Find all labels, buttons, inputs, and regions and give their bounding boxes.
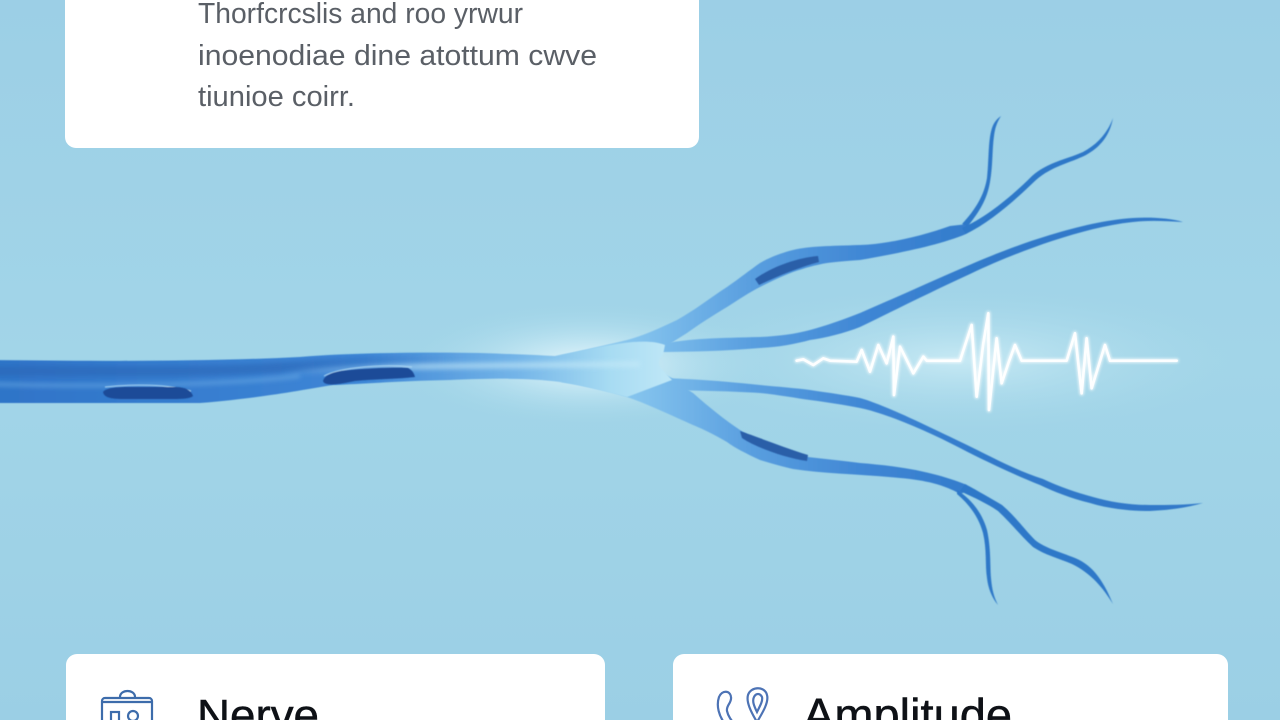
- panel: amplitude card: [673, 654, 1228, 720]
- panel: top text card: [65, 0, 699, 148]
- body text: tiunioe coirr.: [198, 81, 355, 113]
- white waveform glow: [797, 313, 1177, 410]
- node: trunk left: [103, 385, 193, 399]
- nerve trunk: [0, 342, 672, 403]
- upper middle branch: [655, 218, 1183, 352]
- body text: [198, 0, 597, 113]
- lower branch: [560, 365, 1113, 605]
- node: upper branch: [755, 256, 819, 285]
- icon: ears: [718, 688, 767, 720]
- upper branch: [555, 116, 1113, 356]
- icon: clipboard: [102, 691, 152, 720]
- node: trunk right: [323, 366, 415, 384]
- panel: nerve card: [66, 654, 605, 720]
- white waveform: [797, 313, 1177, 410]
- nerve illustration: [0, 116, 1203, 605]
- waveform glow: [670, 285, 1250, 435]
- body text: inoenodiae dine atottum cwve: [198, 40, 597, 72]
- node: lower branch: [740, 431, 808, 461]
- junction glow: [400, 303, 780, 427]
- lower middle branch: [660, 378, 1203, 511]
